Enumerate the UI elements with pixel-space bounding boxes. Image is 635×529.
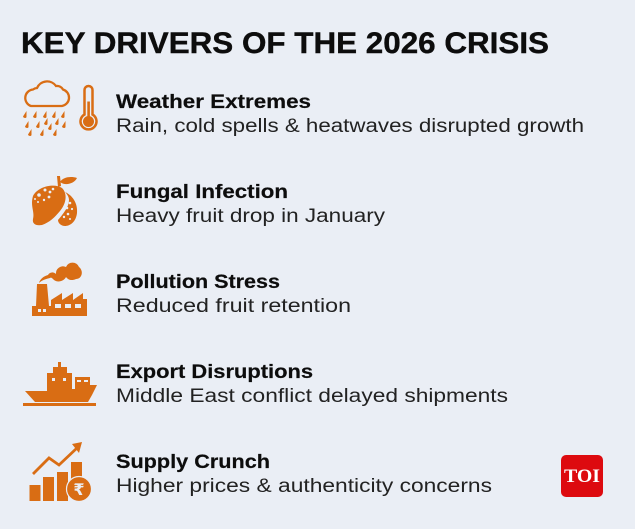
icon: cargo ship xyxy=(23,362,97,406)
icon: factory xyxy=(32,263,87,316)
title: KEY DRIVERS OF THE 2026 CRISIS xyxy=(21,27,549,60)
icon: rising bar chart with rupee coin: ₹ xyxy=(73,480,85,499)
icon: mango xyxy=(32,176,77,226)
heading: Pollution Stress: Pollution Stress xyxy=(116,272,280,293)
heading: Weather Extremes: Weather Extremes xyxy=(116,92,311,113)
heading: Export Disruptions: Export Disruptions xyxy=(116,362,313,383)
icon: rain cloud and thermometer xyxy=(23,81,96,136)
logo: TOI xyxy=(561,455,603,497)
text: supply description: Higher prices & authenticity concerns xyxy=(116,476,492,497)
text: export description: Middle East conflict delayed shipments xyxy=(116,386,508,407)
text: fungal description: Heavy fruit drop in January xyxy=(116,206,386,227)
heading: Fungal Infection: Fungal Infection xyxy=(116,182,288,203)
heading: Supply Crunch: Supply Crunch xyxy=(116,452,270,473)
icon: rising bar chart with rupee coin xyxy=(30,442,92,502)
text: weather description: Rain, cold spells & heatwaves disrupted growth xyxy=(116,116,584,137)
logo: TOI: TOI xyxy=(564,466,600,487)
text: pollution description: Reduced fruit retention xyxy=(116,296,351,317)
